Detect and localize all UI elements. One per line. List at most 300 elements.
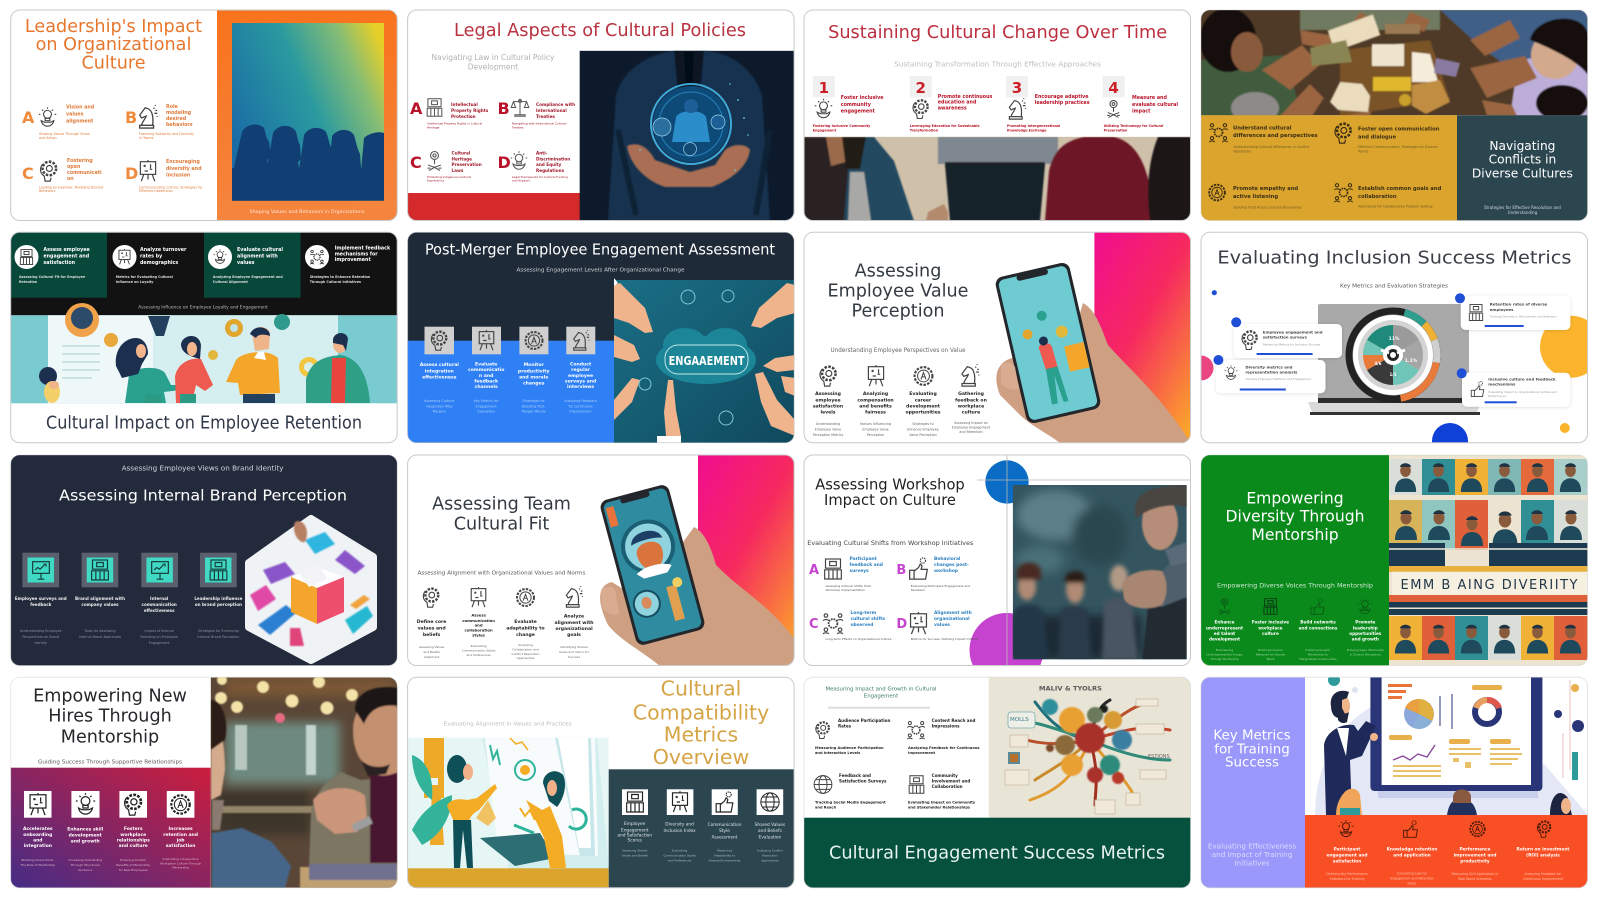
subtitle: Understanding Employee Perspectives on Value xyxy=(830,347,966,354)
heading: Promote xyxy=(1355,620,1376,624)
icon: people xyxy=(908,722,924,739)
item D xyxy=(896,610,978,641)
decorative pink circle xyxy=(1188,356,1214,380)
description: Employee Value xyxy=(815,428,841,432)
heading: Protection xyxy=(451,114,476,119)
description: Knowledge Exchange xyxy=(1007,128,1047,132)
heading: observed xyxy=(850,622,873,628)
heading: Foster inclusive xyxy=(1252,620,1289,624)
item 4 xyxy=(160,791,201,870)
description: in Diverse Workplaces xyxy=(1350,652,1381,656)
icon: framed diagram xyxy=(911,612,926,634)
description: for Continuous xyxy=(568,404,593,408)
orange side panel xyxy=(217,10,398,221)
icon: globe xyxy=(814,776,832,793)
progress bar xyxy=(1257,353,1313,355)
column 4 xyxy=(1347,598,1384,656)
heading: Retention rates of diverse xyxy=(1490,302,1548,306)
description: Communicating Culture: Strategies for xyxy=(139,186,203,190)
metric 3 xyxy=(208,245,283,284)
heading: Intellectual xyxy=(451,102,478,107)
title: on Organizational xyxy=(36,35,191,55)
subtitle: Assessing Engagement Levels After Organizational Change xyxy=(516,267,685,273)
icon: board xyxy=(909,776,924,793)
description: Rates xyxy=(1408,882,1417,886)
heading: ed talent xyxy=(1214,631,1235,636)
description: Evaluating xyxy=(672,848,687,852)
caption: Shaping Values and Behaviors in Organizations xyxy=(250,209,365,215)
column 2 xyxy=(462,587,496,657)
footer band xyxy=(804,818,1191,889)
red footer bar xyxy=(408,193,581,221)
item A xyxy=(22,104,95,140)
description: Leading by Example: Modeling Desired xyxy=(39,186,103,190)
heading: Understand cultural xyxy=(1233,126,1292,132)
description: Factors Influencing xyxy=(860,422,891,426)
heading: Employee surveys and xyxy=(15,596,67,601)
title: Metrics xyxy=(664,722,738,746)
number 4: 4 xyxy=(1108,79,1119,97)
title: Assessing Workshop xyxy=(815,476,965,493)
heading: engagement and xyxy=(43,254,90,260)
description: and Preferences xyxy=(668,858,692,862)
panel: Assessing Employee Value Perception xyxy=(804,232,1191,443)
heading: Inclusive culture and feedback xyxy=(1488,376,1556,382)
column 1 xyxy=(617,789,652,858)
heading: effectiveness xyxy=(144,608,175,613)
heading: Preservation xyxy=(452,162,482,167)
card: diversity metrics xyxy=(1213,355,1326,393)
icon: graduate xyxy=(1537,821,1550,837)
heading: Involvement and xyxy=(932,778,970,784)
panel: Cultural Compatibility Metrics Overview xyxy=(408,677,795,888)
description: and Stakeholder Relationships xyxy=(908,806,970,810)
number 1: 1 xyxy=(819,79,829,97)
description: Approaches xyxy=(517,656,535,660)
image: engagement hands xyxy=(614,278,795,443)
title: Conflicts in xyxy=(1489,153,1556,167)
heading: development xyxy=(69,833,103,839)
heading: Diversity metrics and xyxy=(1245,364,1293,370)
heading: Diversity and xyxy=(665,822,694,828)
figures xyxy=(125,368,181,403)
description: Tracking Employee Feedback and Engagement xyxy=(1244,377,1312,381)
description: Transformation xyxy=(910,128,939,132)
heading: and Satisfaction xyxy=(617,833,652,839)
heading: Fostering xyxy=(67,158,93,164)
icon: knight xyxy=(566,586,582,607)
description: Merger Morale xyxy=(522,410,546,414)
column 2 xyxy=(663,789,696,862)
description: Analyzing Feedback for Continuous xyxy=(908,746,980,750)
heading: Community xyxy=(932,773,958,778)
image: hand holding phone xyxy=(994,261,1191,443)
description: Reframing Metrics for Inclusion Success xyxy=(1263,342,1321,346)
icon: gear head xyxy=(816,722,829,738)
heading: Define core xyxy=(417,619,446,625)
icon: scales xyxy=(511,99,529,116)
heading: onboarding xyxy=(23,832,52,838)
heading: organizational xyxy=(934,616,970,622)
description: Workplace Culture Through xyxy=(160,862,201,866)
image: pointing man photo xyxy=(1012,485,1187,660)
gradient block xyxy=(698,455,795,666)
heading: Gathering xyxy=(958,391,984,397)
heading: Evaluate xyxy=(514,619,537,625)
heading: Foster inclusive xyxy=(841,95,884,101)
panel: Cultural Engagement Success Metrics xyxy=(804,677,1191,889)
title: Post-Merger Employee Engagement Assessment xyxy=(425,240,775,258)
title: Cultural Fit xyxy=(454,514,549,534)
orange panel xyxy=(1305,815,1588,889)
heading: Establish common goals and xyxy=(1358,186,1442,192)
description: Goals and Vision for xyxy=(559,650,590,654)
description: Strategies to xyxy=(912,422,934,426)
image: handshake illustration xyxy=(11,303,398,403)
badge xyxy=(1231,317,1241,327)
heading: Promote empathy and xyxy=(1233,186,1298,192)
icon: people xyxy=(1210,124,1227,142)
card: retention rates xyxy=(1455,293,1570,330)
item 2 xyxy=(75,553,125,639)
heading: satisfaction xyxy=(1333,859,1361,865)
panel: Evaluating Inclusion Success Metrics xyxy=(1188,232,1600,459)
description: Teams xyxy=(1357,150,1369,154)
description: and Preferences xyxy=(466,653,491,657)
description: Engagement and Retention xyxy=(1390,876,1434,880)
title: Empowering xyxy=(1246,489,1344,507)
description: Talent xyxy=(1265,657,1275,661)
subtitle: Evaluating Cultural Shifts from Workshop Initiatives xyxy=(807,541,973,547)
heading: Vision and xyxy=(66,104,95,110)
heading: Analyze turnover xyxy=(140,247,187,253)
icon tile xyxy=(141,553,178,587)
icon: gear head xyxy=(40,162,56,181)
heading: Knowledge retention xyxy=(1387,846,1437,852)
heading: organizational xyxy=(555,626,593,632)
heading: Shared Values xyxy=(755,822,786,828)
heading: open xyxy=(67,165,81,170)
title: Legal Aspects of Cultural Policies xyxy=(454,21,746,41)
description: Evaluating Participant Engagement and xyxy=(911,584,970,588)
description: Internal Brand Awareness xyxy=(79,635,121,639)
description: Perception xyxy=(867,433,884,437)
description: Building Trust Across Cultural Boundaries xyxy=(1234,206,1302,210)
description: Techniques for Collaborative Problem Solving xyxy=(1357,204,1432,208)
icon: bulb xyxy=(1225,365,1237,379)
icon tile xyxy=(167,791,194,818)
title: Overview xyxy=(653,745,749,769)
panel: Assessing Internal Brand Perception xyxy=(11,455,397,666)
item 4 xyxy=(1335,184,1442,208)
heading: communication xyxy=(462,618,495,623)
description: Performance xyxy=(1488,394,1506,398)
heading: alignment xyxy=(66,118,94,124)
heading: changes post- xyxy=(934,562,969,568)
description: Expressions xyxy=(427,178,445,182)
item C xyxy=(410,150,482,182)
heading: integration xyxy=(24,843,52,849)
icon: scales columns xyxy=(427,99,442,116)
heading: Inclusion Index xyxy=(663,828,696,834)
description: Shaping Values Through Vision xyxy=(39,132,90,136)
step 3 xyxy=(518,327,549,414)
description: Assessing Cultural xyxy=(424,399,455,403)
icon tile xyxy=(82,553,118,587)
column 3 xyxy=(905,367,941,437)
description: Fostering Solidarity and Diversity xyxy=(139,132,194,136)
right woman xyxy=(543,771,565,807)
image: puzzle hands photo xyxy=(1200,8,1588,124)
description: Improvement xyxy=(570,410,592,414)
title: Evaluating Inclusion Success Metrics xyxy=(1217,248,1571,268)
title: Perception xyxy=(851,302,945,322)
title: Compatibility xyxy=(633,700,769,724)
progress bar xyxy=(1240,388,1286,390)
icon: easel xyxy=(140,160,156,181)
description: Behaviors xyxy=(39,189,56,193)
icon: pin xyxy=(1107,100,1120,118)
description: Employee Engagement xyxy=(952,426,991,430)
heading: feedback xyxy=(474,378,499,384)
image: cafe conversation photo xyxy=(211,675,398,889)
heading: adaptability to xyxy=(506,626,545,632)
icon tile xyxy=(71,791,100,818)
icon: gear head xyxy=(423,589,438,607)
heading: and benefits xyxy=(859,403,892,409)
description: Understanding xyxy=(816,422,840,426)
green block 3 xyxy=(204,232,300,298)
description: Retention xyxy=(19,280,38,284)
heading: career xyxy=(915,397,932,403)
heading: workplace xyxy=(120,832,146,838)
panel: Leadership's Impact on Organizational Culture xyxy=(11,10,398,221)
heading: opportunities xyxy=(905,410,941,416)
item B xyxy=(896,556,970,592)
heading: improvement xyxy=(335,257,371,263)
description: Assessing Cultural Fit for Employee xyxy=(19,275,86,279)
heading: awareness xyxy=(938,106,967,112)
description: Evaluating xyxy=(471,644,487,648)
icon tile xyxy=(119,791,147,818)
description: Adaptability to xyxy=(714,854,735,858)
description: Assessing Impact on xyxy=(954,421,988,425)
description: Diverse Environments xyxy=(709,858,741,862)
heading: Evaluate xyxy=(475,362,497,368)
description: Alignment xyxy=(424,655,440,659)
item 3 xyxy=(116,791,150,872)
title: Diverse Cultures xyxy=(1472,167,1573,181)
heading: feedback and xyxy=(850,562,883,568)
heading: Participant xyxy=(1334,846,1360,852)
column 4 xyxy=(755,789,786,862)
panel: Assessing Team Cultural Fit xyxy=(408,455,795,666)
heading: collaboration xyxy=(464,627,493,632)
description: Influence on Loyalty xyxy=(116,280,154,284)
icon tile xyxy=(667,789,693,815)
description: Cultural Alignment xyxy=(213,280,248,284)
icon: knight xyxy=(1009,98,1025,119)
metric 2 xyxy=(1387,821,1437,886)
heading: active listening xyxy=(1233,194,1278,200)
heading: Monitor xyxy=(524,362,545,368)
heading: Analyzing xyxy=(863,391,888,397)
icon: bulb xyxy=(815,99,832,118)
heading: integration xyxy=(425,368,454,374)
description: Evaluating Impact on Community xyxy=(908,801,976,805)
description: Through Structured xyxy=(70,863,100,867)
subtitle: Empowering Diverse Voices Through Mentorship xyxy=(1217,583,1373,589)
decorative blue circle xyxy=(1432,423,1468,459)
heading: Heritage xyxy=(452,156,472,162)
item D xyxy=(498,150,570,182)
letter C: C xyxy=(809,617,819,632)
description: Measuring Skill Application in xyxy=(1452,872,1498,876)
description: Indicators for Training xyxy=(1330,877,1364,881)
heading: Promote continuous xyxy=(938,94,993,100)
heading: interviews xyxy=(567,384,594,390)
subtitle: Initiatives xyxy=(1234,858,1270,867)
heading: and dialogue xyxy=(1358,134,1396,140)
title: Assessing Internal Brand Perception xyxy=(59,487,347,505)
heading: and culture xyxy=(119,843,148,849)
heading: and xyxy=(33,838,43,844)
heading: Enhance xyxy=(1215,620,1235,624)
heading: Anti- xyxy=(536,150,548,156)
step 4 xyxy=(1103,76,1178,132)
description: Cultivating a Supportive xyxy=(162,857,199,861)
heading: Assess xyxy=(471,613,487,618)
presenter xyxy=(1324,721,1376,815)
icon: growth xyxy=(1404,821,1417,837)
item D xyxy=(125,159,203,193)
image: diversity mosaic xyxy=(1389,455,1588,666)
description: Evaluating Learner xyxy=(1397,872,1428,876)
heading: retention and xyxy=(163,832,198,838)
heading: diversity and xyxy=(166,166,202,172)
description: Continuous Improvement xyxy=(1523,877,1564,881)
icon tile xyxy=(24,791,52,818)
letter A: A xyxy=(22,108,35,127)
description: Through Cultural Initiatives xyxy=(310,280,361,284)
title: Diversity Through xyxy=(1225,508,1365,526)
column 3 xyxy=(1299,599,1338,661)
title: Key Metrics xyxy=(1213,728,1291,743)
description: Communication Styles xyxy=(462,648,496,652)
description: Enhance Employee xyxy=(907,428,939,432)
panel: Legal Aspects of Cultural Policies xyxy=(408,10,795,221)
heading: Evaluate cultural xyxy=(237,247,283,253)
image: analytics illustration xyxy=(408,738,609,869)
heading: underrepresent xyxy=(1206,626,1243,630)
title: Mentorship xyxy=(1251,526,1339,544)
heading: improvement and xyxy=(1454,852,1496,858)
description: Networks for Diverse xyxy=(1256,652,1285,656)
icon: gear head xyxy=(820,367,836,386)
description: and Interaction Levels xyxy=(815,751,860,755)
description: Bridging Gaps: Mentorship xyxy=(1347,648,1384,652)
image: team photo xyxy=(804,137,1191,221)
subtitle: Evaluating Alignment in Values and Practices xyxy=(444,722,572,728)
icon: gear head xyxy=(1242,331,1257,350)
metric 4 xyxy=(305,245,391,284)
icon: easel xyxy=(112,245,136,269)
heading: representation analysis xyxy=(1245,370,1298,374)
heading: rates by xyxy=(140,254,163,260)
heading: Alignment with xyxy=(934,610,972,616)
yellow panel xyxy=(1201,115,1457,221)
item 1 xyxy=(20,791,55,867)
heading: and growth xyxy=(1352,636,1379,641)
heading: satisfaction xyxy=(166,843,195,849)
heading: Content Reach and xyxy=(932,718,975,723)
description: Tracking Diversity in Recruitment and Retention xyxy=(1489,314,1557,318)
icon: board xyxy=(1264,599,1277,614)
description: Identity xyxy=(34,641,47,645)
image: hand holding phone xyxy=(599,483,795,666)
item B xyxy=(125,104,194,140)
heading: productivity xyxy=(518,368,549,374)
laptop with dial chart: 11% xyxy=(1389,336,1400,342)
heading: Participant xyxy=(850,556,877,562)
heading: mechanisms xyxy=(1488,382,1516,386)
column 4 xyxy=(554,586,594,659)
description: Key Metrics for xyxy=(474,399,499,403)
icon tile xyxy=(22,553,59,587)
heading: behaviors xyxy=(166,122,193,128)
step 3 xyxy=(1006,76,1090,132)
step 2 xyxy=(468,327,504,414)
description: Mentorship xyxy=(172,866,189,870)
engagement label: ENGAAEMENT xyxy=(669,353,745,368)
heading: Leadership influence xyxy=(194,596,243,601)
left woman xyxy=(447,784,497,824)
description: Analyzing Feedback for xyxy=(1524,872,1562,876)
icon tile xyxy=(712,789,738,815)
heading: Impressions xyxy=(932,724,960,728)
heading: relationships xyxy=(117,838,150,844)
heading: Behavioral xyxy=(934,556,961,562)
item C xyxy=(809,610,892,641)
heading: n and xyxy=(479,373,493,379)
heading: job xyxy=(176,838,185,844)
letter D: D xyxy=(896,617,907,632)
step 1 xyxy=(813,76,884,132)
progress bar xyxy=(1485,401,1517,403)
icon: bulb xyxy=(208,245,232,269)
icon: compass xyxy=(427,152,442,170)
description: Benefits of Mentorship xyxy=(116,863,150,867)
heading: inclusion xyxy=(166,172,191,178)
card: inclusive culture xyxy=(1457,368,1570,407)
heading: opportunities xyxy=(1349,631,1382,636)
title: Impact on Culture xyxy=(824,492,956,509)
badge xyxy=(1455,293,1465,303)
description: Leveraging Education for Sustainable xyxy=(910,124,980,128)
heading: engagement xyxy=(841,108,875,114)
description: Resolution xyxy=(1234,150,1251,154)
heading: development xyxy=(906,403,941,409)
heading: International xyxy=(536,108,567,113)
description: Identifying Shared xyxy=(560,645,588,649)
image: silhouettes on gradient xyxy=(232,23,384,201)
card: engagement surveys xyxy=(1231,317,1342,358)
icon tile xyxy=(472,327,501,354)
heading: alignment with xyxy=(237,254,278,260)
title: Assessing Team xyxy=(432,494,571,514)
icon tile xyxy=(200,553,237,587)
description: Branding on Employee xyxy=(140,635,178,639)
